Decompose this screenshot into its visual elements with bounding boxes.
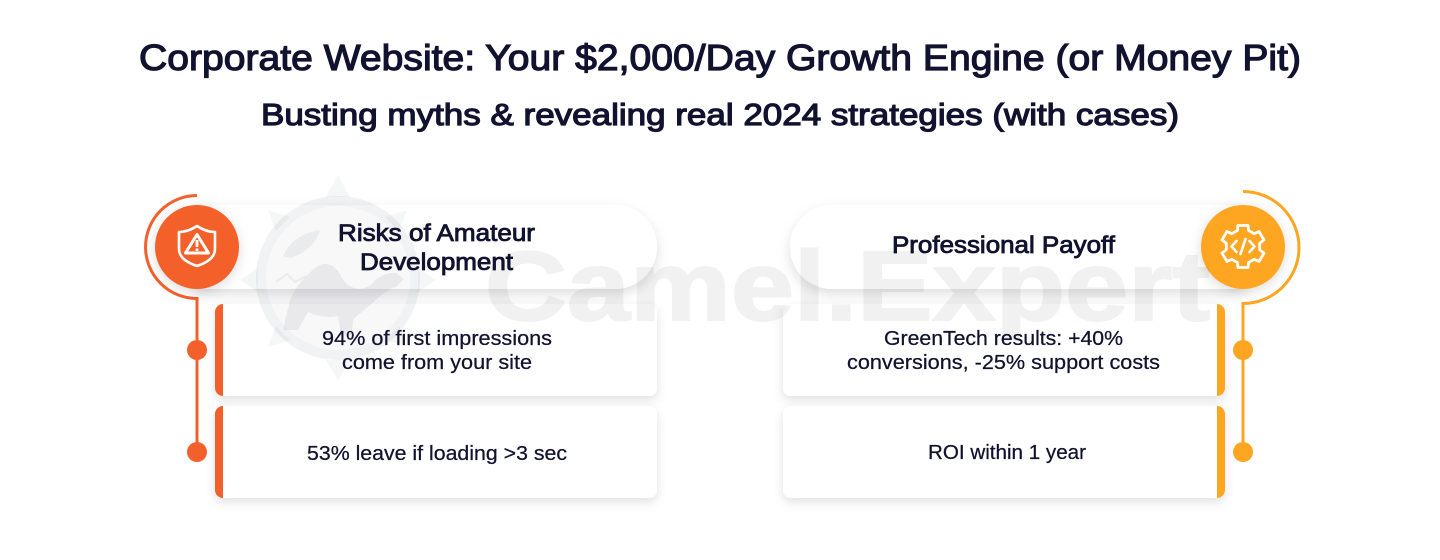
watermark: Camel.Expert: Camel.Expert xyxy=(485,231,1210,341)
card: greentech results: conversions, -25% support costs xyxy=(847,352,1160,374)
card: first impressions xyxy=(215,304,657,396)
timeline: payoff connector xyxy=(1233,192,1299,462)
panel: risks of amateur development xyxy=(146,196,657,498)
timeline: risks connector xyxy=(146,196,207,462)
icon: code gear xyxy=(1201,205,1285,289)
card: greentech results xyxy=(783,304,1225,396)
card: loading time xyxy=(215,406,657,498)
title: Corporate Website: Your $2,000/Day Growth Engine (or Money Pit) xyxy=(139,37,1301,78)
heading pill: risks xyxy=(197,205,657,289)
card: ROI: ROI within 1 year xyxy=(928,442,1086,464)
card: greentech results: GreenTech results: +40% xyxy=(884,328,1123,350)
heading pill: risks: Development xyxy=(360,249,513,276)
card: first impressions: come from your site xyxy=(342,352,532,374)
icon: warning shield xyxy=(155,205,239,289)
watermark: compass camel emblem xyxy=(240,175,436,381)
heading pill: payoff: Professional Payoff xyxy=(892,232,1115,259)
card: ROI xyxy=(783,406,1225,498)
heading pill: risks: Risks of Amateur xyxy=(338,220,535,247)
heading pill: payoff xyxy=(790,205,1243,289)
panel: professional payoff xyxy=(783,192,1299,498)
card: first impressions: 94% of first impressions xyxy=(322,328,552,350)
card: loading time: 53% leave if loading >3 sec xyxy=(307,443,567,465)
subtitle: Busting myths & revealing real 2024 strategies (with cases) xyxy=(261,97,1179,132)
